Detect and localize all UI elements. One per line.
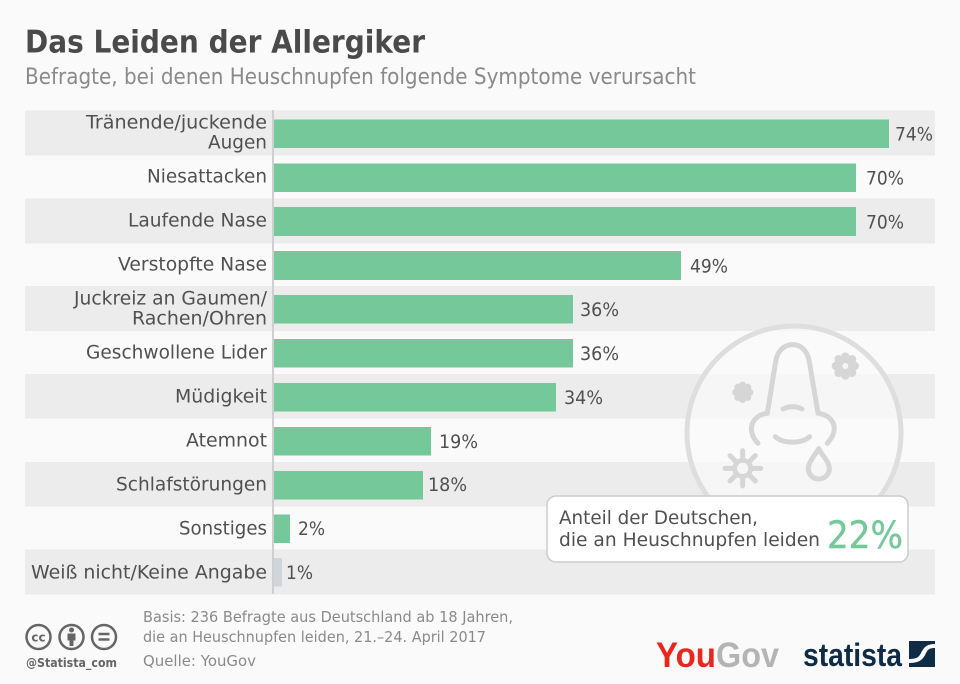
icon: flower right xyxy=(832,352,859,380)
logo: YouGov: Gov xyxy=(716,636,779,675)
bar: Atemnot xyxy=(186,427,478,456)
callout text: Anteil der Deutschen, xyxy=(559,507,758,529)
bar: Atemnot: Atemnot xyxy=(186,430,267,452)
bar: Juckreiz an Gaumen/Rachen/Ohren: Rachen/Ohren xyxy=(132,308,267,330)
bar: Atemnot: 19% xyxy=(439,431,478,453)
icon: cc: cc xyxy=(31,630,46,644)
icon: nostril line xyxy=(783,407,802,409)
bar: Weiß nicht/Keine Angabe: Weiß nicht/Keine Angabe xyxy=(31,562,267,584)
title: Das Leiden der Allergiker xyxy=(25,24,426,60)
bar: Tränende/juckende Augen: Tränende/juckende xyxy=(85,112,267,134)
callout text xyxy=(559,507,820,551)
source note: die an Heuschnupfen leiden, 21.–24. April 2017 xyxy=(143,628,486,646)
bar: Juckreiz an Gaumen/Rachen/Ohren: Juckreiz an Gaumen/ xyxy=(73,288,268,310)
bar: Weiß nicht/Keine Angabe: 1% xyxy=(286,562,313,584)
bar: Tränende/juckende Augen: Augen xyxy=(208,132,267,154)
icon: drop xyxy=(808,449,829,479)
subtitle: Befragte, bei denen Heuschnupfen folgende Symptome verursacht xyxy=(25,64,696,90)
bar: Geschwollene Lider: Geschwollene Lider xyxy=(86,342,267,364)
icon: nose outline xyxy=(751,345,834,443)
icon: sun virus xyxy=(725,451,761,486)
source note xyxy=(143,608,513,670)
source note: Quelle: YouGov xyxy=(143,652,256,670)
logo: YouGov: You xyxy=(656,636,716,675)
bar: Niesattacken: Niesattacken xyxy=(147,166,267,188)
bar: Verstopfte Nase: Verstopfte Nase xyxy=(118,254,267,276)
bar: Schlafstörungen: Schlafstörungen xyxy=(116,474,267,496)
icon: statista mark xyxy=(909,641,935,667)
bar: Schlafstörungen: 18% xyxy=(428,474,467,496)
bar: Weiß nicht/Keine Angabe xyxy=(31,558,313,586)
callout value: 22% xyxy=(827,514,903,557)
bar: Verstopfte Nase xyxy=(118,251,728,280)
bar: Tränende/juckende Augen xyxy=(85,112,933,154)
logo: YouGov xyxy=(656,636,779,675)
icon: creative commons xyxy=(26,625,116,649)
bar: Sonstiges: 2% xyxy=(298,518,325,540)
icon: nose in circle xyxy=(687,326,901,540)
bar: Niesattacken xyxy=(147,164,904,192)
bar: Juckreiz an Gaumen/Rachen/Ohren xyxy=(73,288,619,330)
bar: Laufende Nase: Laufende Nase xyxy=(128,210,267,232)
icon: equals xyxy=(92,625,116,649)
bar: Schlafstörungen xyxy=(116,471,467,500)
icon: flower left xyxy=(732,382,753,403)
bar: Müdigkeit: Müdigkeit xyxy=(175,386,267,408)
bar: Müdigkeit xyxy=(175,383,603,412)
bar: Laufende Nase xyxy=(128,207,904,236)
callout text: die an Heuschnupfen leiden xyxy=(559,529,820,551)
callout xyxy=(547,496,908,562)
icon: mouth curve xyxy=(775,437,810,442)
source note: Basis: 236 Befragte aus Deutschland ab 18 Jahren, xyxy=(143,608,513,626)
bar: Juckreiz an Gaumen/Rachen/Ohren: 36% xyxy=(580,299,619,321)
icon: person xyxy=(60,625,84,649)
bar chart xyxy=(73,112,933,412)
bar: Sonstiges xyxy=(179,514,325,543)
bar: Geschwollene Lider: 36% xyxy=(580,343,619,365)
bar: Geschwollene Lider xyxy=(86,339,619,368)
bar: Laufende Nase: 70% xyxy=(866,212,904,234)
bar: Müdigkeit: 34% xyxy=(564,387,603,409)
axis line xyxy=(272,110,274,594)
bar: Tränende/juckende Augen: 74% xyxy=(895,124,933,146)
logo: statista: statista xyxy=(803,637,902,673)
handle: @Statista_com xyxy=(26,655,117,671)
bar: Niesattacken: 70% xyxy=(866,168,904,190)
bar: Sonstiges: Sonstiges xyxy=(179,518,267,540)
bar: Verstopfte Nase: 49% xyxy=(690,256,728,278)
